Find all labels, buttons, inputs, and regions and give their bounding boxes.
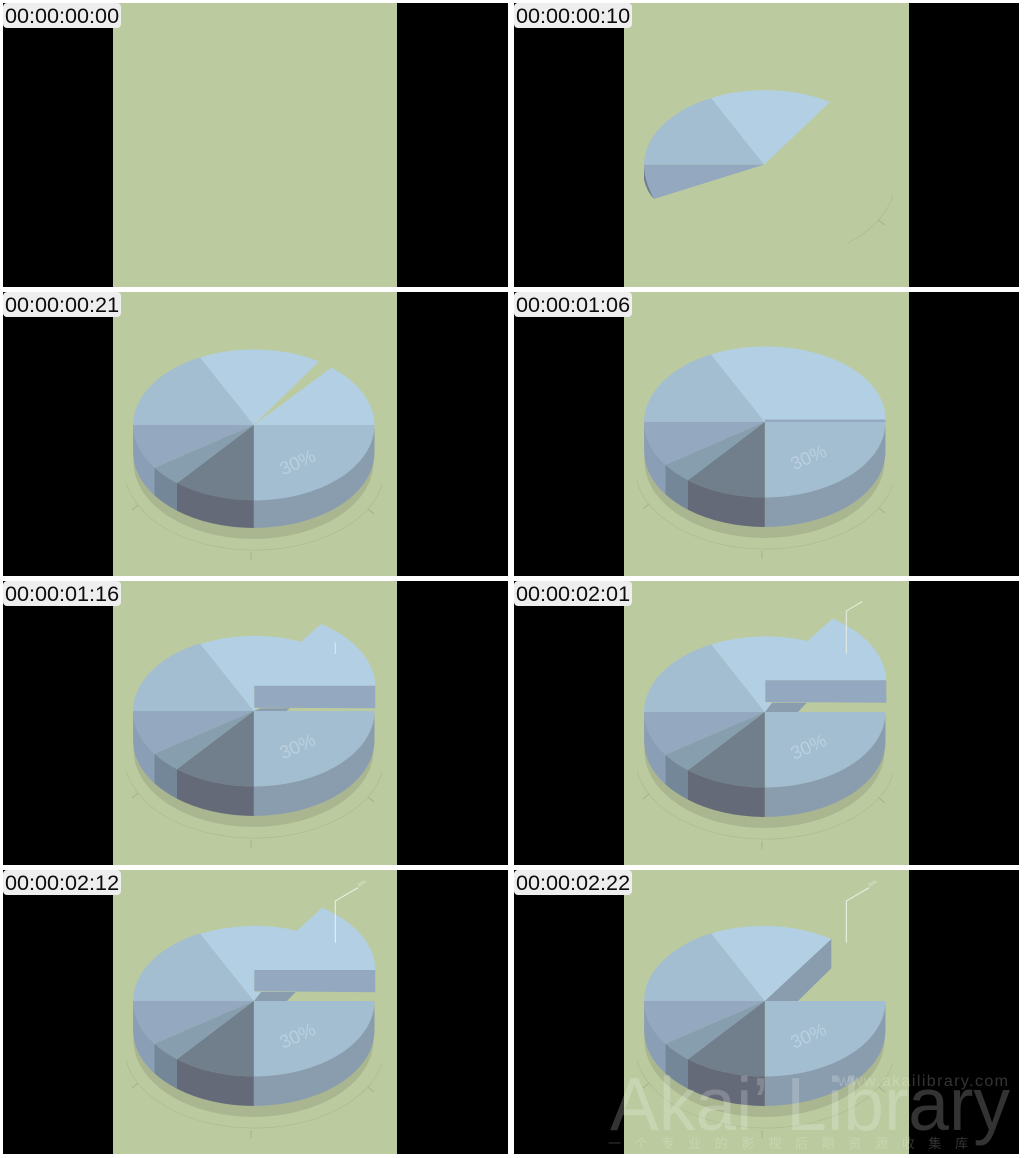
- frame 2: pie building in: [514, 3, 1019, 287]
- timecode 00:00:00:10: 00:00:00:10: [516, 3, 630, 28]
- pie at 00:00:01:06: 30%: [787, 440, 830, 474]
- pie at 00:00:02:22: 30%: [787, 1018, 830, 1053]
- pie at 00:00:02:01: [637, 602, 893, 849]
- pie at 00:00:02:12: [126, 879, 382, 1138]
- watermark: Akai Library: www.akailibrary.com: [837, 1073, 1008, 1090]
- frame 4: complete pie: [514, 292, 1019, 576]
- timecode 00:00:02:22: 00:00:02:22: [516, 870, 630, 895]
- timecode 00:00:01:16: 00:00:01:16: [5, 581, 119, 606]
- pie at 00:00:00:21: 30%: [276, 445, 319, 479]
- pie at 00:00:01:16: [126, 624, 382, 848]
- frame 1: empty green panel: [3, 3, 508, 287]
- timecode 00:00:00:00: 00:00:00:00: [5, 3, 119, 28]
- watermark: Akai Library: 一个专业的影视后期资源收集库: [608, 1136, 982, 1151]
- frame 5: slice beginning to lift: [3, 581, 508, 865]
- pie at 00:00:01:06: [637, 346, 893, 559]
- pie at 00:00:01:16: 30%: [276, 729, 319, 763]
- pie at 00:00:02:12: 30%: [356, 879, 367, 888]
- frame 7: leader line with small label: [3, 870, 508, 1154]
- timecode 00:00:02:12: 00:00:02:12: [5, 870, 119, 895]
- watermark: Akai Library: Akai’ Library: [610, 1062, 1010, 1146]
- pie at 00:00:00:21: [126, 350, 382, 560]
- pie at 00:00:02:22: [637, 879, 893, 1138]
- frame 8: slice separated from pie: [514, 870, 1019, 1154]
- pie at 00:00:02:12: 30%: [276, 1018, 319, 1053]
- timecode 00:00:00:21: 00:00:00:21: [5, 292, 119, 317]
- frame 3: pie with wedge gap: [3, 292, 508, 576]
- pie at 00:00:02:22: 30%: [868, 879, 878, 888]
- pie at 00:00:02:01: 30%: [787, 729, 830, 764]
- frame 6: slice lifted with leader line: [514, 581, 1019, 865]
- timecode 00:00:01:06: 00:00:01:06: [516, 292, 630, 317]
- pie slices at 00:00:00:10: [644, 90, 893, 243]
- timecode 00:00:02:01: 00:00:02:01: [516, 581, 630, 606]
